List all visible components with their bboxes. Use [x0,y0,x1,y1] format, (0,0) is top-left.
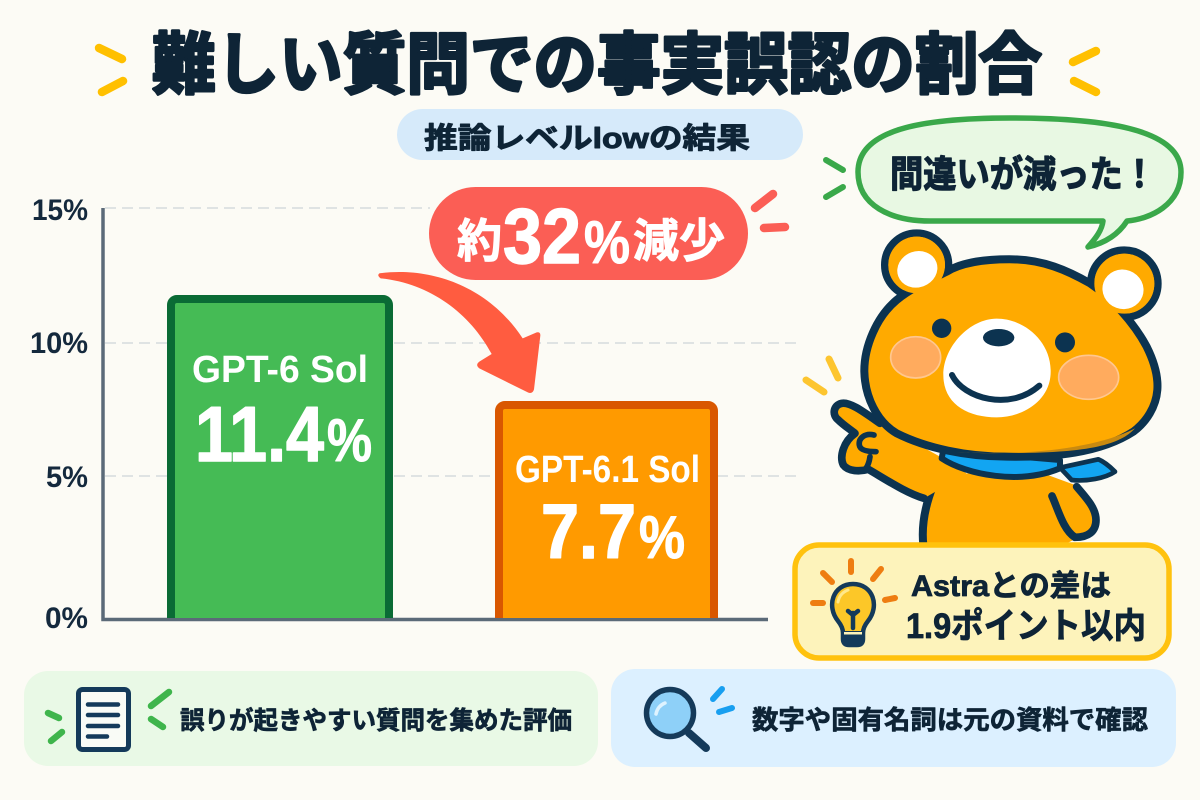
bear muzzle [943,319,1051,417]
bear scarf knot [1060,459,1115,480]
bar: GPT-6.1 Sol: GPT-6.1 Sol [515,449,700,491]
callout: reduction pill: 約 [457,215,502,267]
icon: document [78,690,128,750]
bear mascot [834,233,1158,545]
y axis labels: 5% [46,461,88,494]
bear left ear outer [885,233,949,297]
y axis labels: 10% [30,327,88,360]
chart axes [103,208,768,620]
speech bubble: 間違いが減った！ [890,154,1156,195]
bear fist fingers [859,434,876,468]
panel: evaluation note: 誤りが起きやすい質問を集めた評価 [180,706,572,735]
grid lines [105,208,800,476]
bear head [864,259,1158,457]
bar: GPT-6 Sol: GPT-6 Sol [192,349,368,391]
bear chin shadow [957,428,1135,453]
callout: Astra note: Astraとの差は [911,570,1111,603]
icon: title right accent [1073,51,1096,92]
bar: GPT-6.1 Sol: % [639,504,685,571]
callout: reduction pill: 32 [503,192,581,280]
bear pointing arm outline [834,403,924,498]
icon: document accents [48,692,169,741]
subtitle pill: 推論レベルlowの結果 [424,122,750,155]
bear scarf band [942,450,1060,477]
subtitle pill [397,109,803,160]
icon: magnifier accents [713,689,732,712]
panel: evaluation note [24,671,598,766]
bear right ear outer [1091,250,1158,317]
y axis labels: 0% [45,602,88,635]
arrow: decrease [378,272,540,393]
bear right arm outline [1052,487,1096,537]
icon: title left accent [99,48,123,92]
speech bubble [858,118,1181,247]
callout: reduction pill: 減少 [633,215,725,267]
bar: GPT-6 Sol [171,299,389,618]
bear body outline [923,485,933,545]
callout: reduction pill [429,187,748,280]
panel: verification note: 数字や固有名詞は元の資料で確認 [752,705,1148,735]
icon: pointing accent [806,359,838,392]
bear eyes and nose [932,319,1075,352]
callout: reduction pill: % [584,209,630,276]
icon: light bulb [813,561,895,645]
y axis labels [30,194,88,635]
callout: Astra note [795,545,1169,658]
bar: GPT-6.1 Sol: 7.7 [541,489,636,575]
bear left ear inner [888,237,945,293]
bear mouth [952,375,1039,400]
title: 難しい質問での事実誤認の割合 [152,28,1042,103]
bar chart [30,194,800,635]
y axis labels: 15% [32,194,88,227]
callout: Astra note: 1.9ポイント以内 [906,607,1146,646]
icon: magnifier [646,690,706,748]
bear right ear inner [1094,254,1154,315]
bear body fill [922,460,1096,545]
bar: GPT-6 Sol: % [327,407,372,474]
bear cheeks [891,337,1119,399]
icon: pill accent [755,194,785,228]
icon: bubble accent [826,160,843,197]
bar: GPT-6 Sol: 11.4 [195,390,324,478]
panel: verification note [611,669,1176,767]
bar: GPT-6.1 Sol [499,405,714,618]
bear pointing arm fill [834,403,967,498]
